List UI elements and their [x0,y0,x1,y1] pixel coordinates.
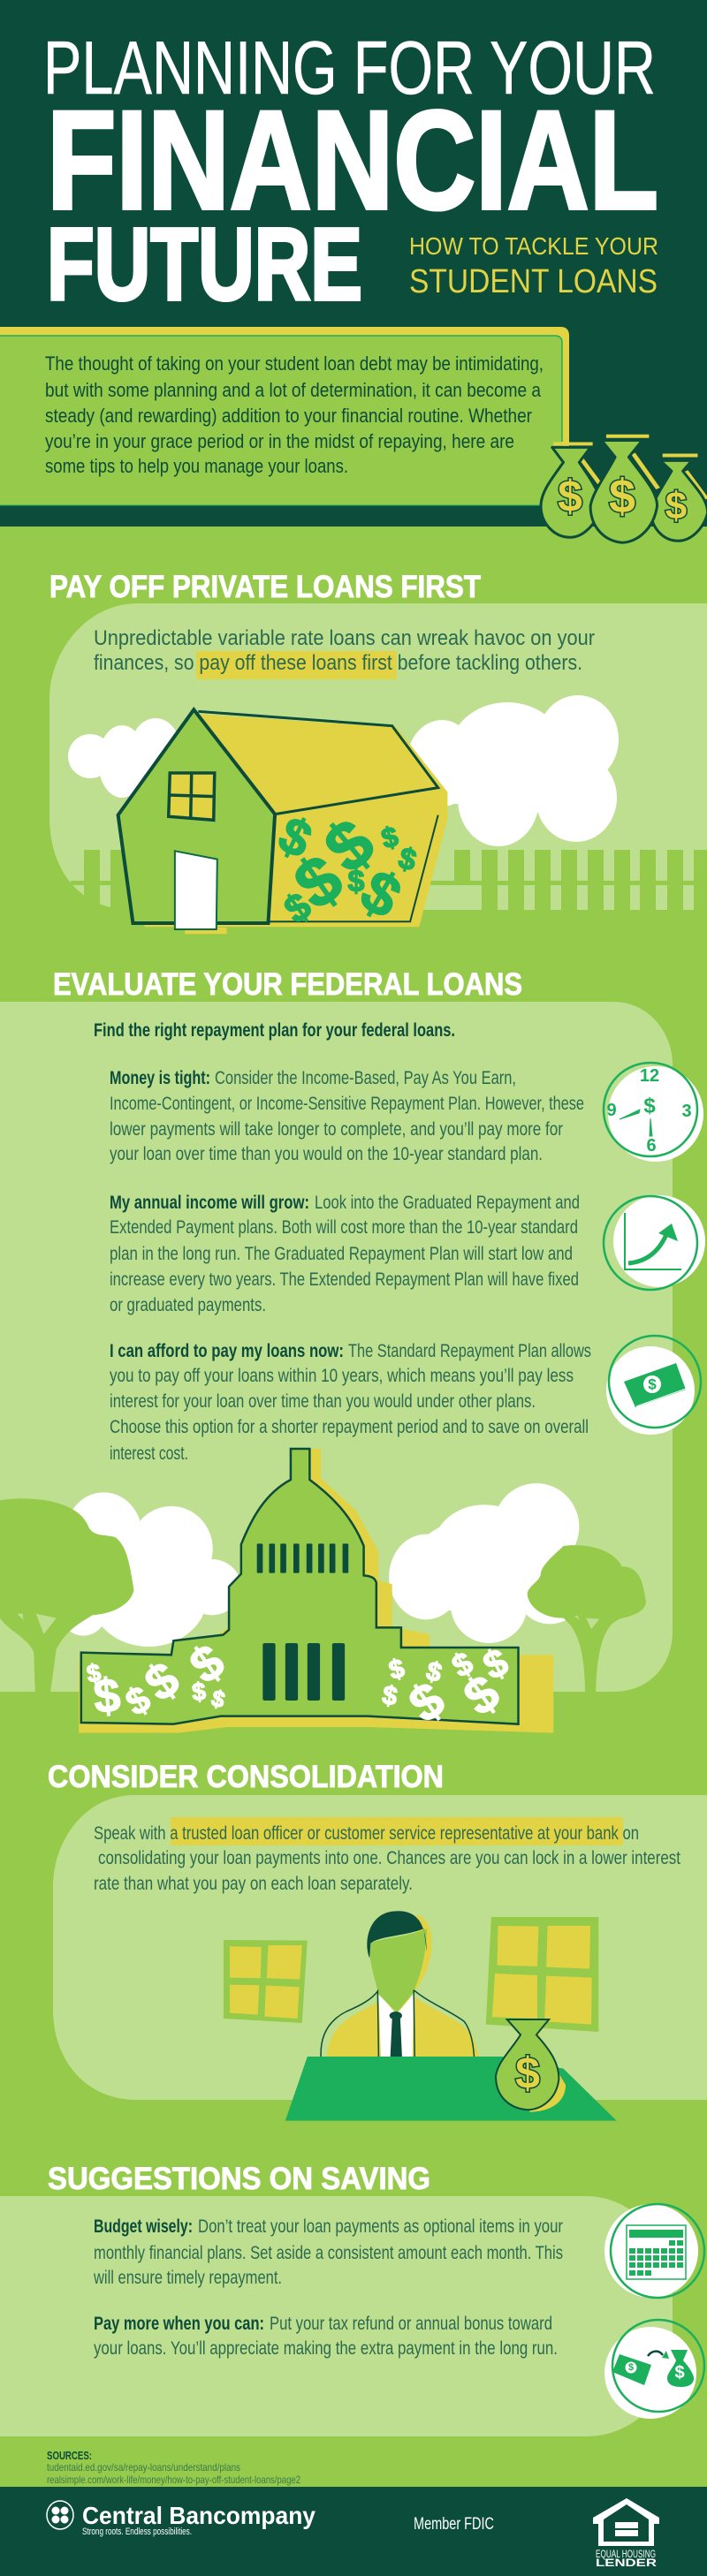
heading: consider consolidation: CONSIDER CONSOLIDATION [48,1760,444,1794]
heading: pay off private loans: PAY OFF PRIVATE LOANS FIRST [49,570,481,604]
private loans text: Unpredictable variable rate loans can wreak havoc on your [94,626,595,650]
white dollar signs [85,1633,514,1734]
text: budget wisely [93,2216,563,2288]
white dollar signs: $ [191,1678,208,1706]
panel: private loans [49,603,707,910]
intro panel [0,327,569,505]
icon: calendar [604,2204,704,2298]
dollar signs: $ [270,806,320,869]
icon: clock: 12 [640,1066,659,1086]
white dollar signs: $ [445,1644,479,1685]
icon: banker at desk [224,1911,617,2121]
intro text [45,352,544,477]
sources: SOURCES: [47,2449,92,2462]
dollar signs: $ [395,841,420,878]
panel: federal loans [0,1002,673,1692]
icon: money bags: $ [609,470,635,523]
intro text: The thought of taking on your student loan debt may be intimidating, [45,352,544,375]
icon: cash [606,1336,701,1435]
clouds [68,695,619,846]
footer [0,2487,707,2576]
header panel [0,0,707,527]
dollar signs: $ [378,820,401,855]
title: FUTURE [47,207,362,322]
text: i can afford to pay [110,1341,591,1464]
intro text: some tips to help you manage your loans. [45,455,348,477]
icon: money bags [541,436,707,542]
intro text: you’re in your grace period or in the midst of repaying, here are [45,430,514,452]
dollar signs [270,803,420,932]
text: budget wisely: will ensure timely repayment. [93,2268,282,2288]
icon: clock: 9 [606,1101,617,1120]
text: money is tight: Consider the Income-Based, Pay As You Earn, [215,1068,516,1088]
text: pay more when you can: your loans. You’ll appreciate making the extra payment in the long run. [94,2338,558,2359]
white dollar signs: $ [91,1669,123,1724]
intro text: but with some planning and a lot of determination, it can become a [45,379,542,401]
text: i can afford to pay: I can afford to pay my loans now: [110,1341,344,1361]
subtitle [409,232,658,300]
white dollar signs: $ [423,1656,445,1688]
windows [224,1917,598,2032]
dollar signs: $ [309,803,389,888]
icon: capitol building [79,1449,553,1734]
dollar signs: $ [348,865,365,898]
text: pay more when you can [94,2314,558,2359]
icon: growth chart [604,1195,705,1290]
sources: tudentaid.ed.gov/sa/repay-loans/understand/plans [47,2461,240,2474]
logo [47,2501,315,2537]
text: budget wisely: monthly financial plans. Set aside a consistent amount each month. This [94,2243,563,2263]
white dollar signs: $ [386,1654,408,1686]
text: money is tight: Income-Contingent, or Income-Sensitive Repayment Plan. However, these [110,1094,584,1114]
icon: clock: $ [643,1094,656,1118]
text: i can afford to pay: interest for your loan over time than you would under other plans. [110,1391,536,1412]
text: budget wisely: Don’t treat your loan payments as optional items in your [198,2216,563,2237]
money bag [496,2019,566,2112]
text: my annual income will grow [110,1193,580,1315]
intro text: steady (and rewarding) addition to your financial routine. Whether [45,405,532,427]
federal intro: Find the right repayment plan for your federal loans. [94,1020,455,1041]
white dollar signs: $ [477,1640,514,1688]
sources [47,2449,300,2486]
desk [285,2057,617,2121]
icon: clock: 6 [646,1136,657,1155]
icon: money bags: $ [665,484,687,528]
fence [71,850,707,910]
bag dollar: $ [515,2049,540,2098]
icon: cash to money bag: $ [628,2362,634,2373]
text: budget wisely: Budget wisely: [94,2216,193,2237]
logo: Strong roots. Endless possibilities. [82,2527,192,2537]
icon: clock [604,1063,703,1162]
icon: clock: 3 [681,1102,692,1121]
text: money is tight [110,1068,584,1164]
white dollar signs: $ [179,1633,234,1694]
text: money is tight: your loan over time than you would on the 10-year standard plan. [110,1144,543,1164]
subtitle: STUDENT LOANS [409,263,658,300]
white dollar signs: $ [453,1663,510,1727]
logo: Central Bancompany [82,2502,315,2529]
equal housing lender: LENDER [596,2557,657,2569]
text: i can afford to pay: Choose this option for a shorter repayment period and to save on overall [110,1417,589,1437]
heading: evaluate federal loans: EVALUATE YOUR FEDERAL LOANS [53,967,522,1002]
private loans text [94,626,595,675]
text: my annual income will grow: My annual income will grow: [110,1193,309,1213]
icon: trees [0,1498,646,1692]
icon: cash to money bag: $ [674,2363,685,2383]
text: money is tight: lower payments will take longer to complete, and you’ll pay more for [110,1119,563,1140]
person [321,1911,479,2057]
icon: house [118,709,447,934]
text: money is tight: Money is tight: [110,1068,210,1088]
consolidation text: rate than what you pay on each loan separately. [94,1874,413,1894]
sources: realsimple.com/work-life/money/how-to-pay-off-student-loans/page2 [47,2474,300,2486]
heading: suggestions on saving: SUGGESTIONS ON SAVING [48,2162,430,2196]
text: my annual income will grow: Extended Payment plans. Both will cost more than the 10-year standard [110,1217,578,1238]
highlight [196,651,397,679]
equal housing lender: EQUAL HOUSING [596,2548,656,2560]
white dollar signs: $ [134,1650,189,1712]
dollar signs: $ [277,884,319,932]
white dollar signs: $ [399,1671,455,1734]
white dollar signs: $ [209,1685,228,1713]
panel: consolidation [53,1795,707,2100]
clouds behind capitol [57,1483,582,1647]
icon: money bags: $ [558,472,582,521]
white dollar signs: $ [118,1678,157,1724]
text: i can afford to pay: The Standard Repayment Plan allows [348,1341,591,1361]
highlight [171,1817,623,1845]
dollar signs: $ [280,839,356,924]
text: pay more when you can: Pay more when you can: [94,2314,264,2334]
white dollar signs: $ [85,1658,103,1688]
white dollar signs: $ [380,1680,399,1712]
text: my annual income will grow: plan in the long run. The Graduated Repayment Plan will start low and [110,1244,573,1264]
dollar signs: $ [350,857,412,931]
title [43,27,658,322]
text: my annual income will grow: increase every two years. The Extended Repayment Plan will have fixed [110,1269,579,1290]
consolidation text [94,1823,680,1894]
text: i can afford to pay: interest cost. [110,1443,188,1464]
icon: cash: $ [648,1376,657,1392]
text: i can afford to pay: you to pay off your loans within 10 years, which means you’ll pay less [110,1366,574,1386]
text: my annual income will grow: or graduated payments. [110,1295,266,1315]
private loans text: finances, so pay off these loans first before tackling others. [94,651,582,675]
icon: cash to money bag [604,2320,704,2419]
text: my annual income will grow: Look into the Graduated Repayment and [315,1193,580,1213]
equal housing lender [593,2498,659,2569]
text: pay more when you can: Put your tax refund or annual bonus toward [270,2314,552,2334]
member fdic: Member FDIC [414,2515,494,2534]
panel: saving [0,2196,673,2436]
subtitle: HOW TO TACKLE YOUR [409,232,658,260]
